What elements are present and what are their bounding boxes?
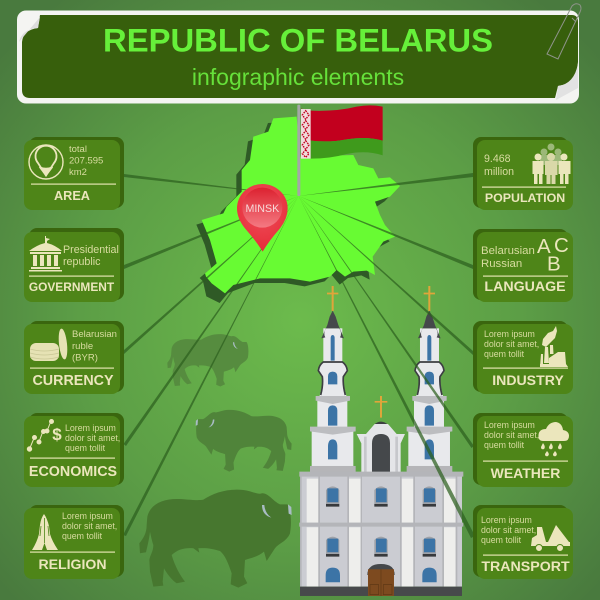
weather text: dolor sit amet, bbox=[484, 430, 539, 440]
religion text: Lorem ipsum bbox=[62, 511, 113, 521]
panel: language bbox=[473, 229, 573, 302]
currency label: CURRENCY bbox=[32, 373, 114, 389]
weather label: WEATHER bbox=[491, 465, 560, 481]
panel: population bbox=[473, 137, 573, 210]
transport text: Lorem ipsum bbox=[481, 515, 532, 525]
transport text: quem tollit bbox=[481, 535, 522, 545]
industry text: quem tollit bbox=[484, 349, 525, 359]
icon: rain cloud bbox=[538, 422, 569, 456]
currency text: ruble bbox=[72, 341, 93, 352]
panel: transport bbox=[473, 505, 573, 579]
weather text: Lorem ipsum bbox=[484, 420, 535, 430]
medium bison bbox=[196, 410, 292, 472]
central gable bbox=[357, 396, 405, 473]
icon: coins bbox=[30, 328, 69, 361]
panel: economics bbox=[24, 413, 124, 487]
language text: Belarusian bbox=[481, 245, 535, 257]
industry label: INDUSTRY bbox=[492, 372, 564, 388]
bison silhouettes bbox=[139, 334, 292, 588]
government label: GOVERNMENT bbox=[29, 280, 115, 294]
icon: paper clip bbox=[547, 4, 581, 59]
economics text: quem tollit bbox=[65, 443, 106, 453]
language text: Russian bbox=[481, 258, 522, 270]
icon: government building bbox=[29, 236, 62, 272]
icon: letters: A bbox=[537, 235, 551, 258]
icon: people group bbox=[532, 144, 570, 184]
banner title: REPUBLIC OF BELARUS bbox=[103, 22, 493, 58]
small bison bbox=[167, 334, 248, 387]
flag of Belarus bbox=[297, 105, 383, 196]
icon: dump truck bbox=[531, 525, 570, 552]
large bison bbox=[139, 490, 292, 588]
government text: Presidential bbox=[63, 244, 119, 256]
transport label: TRANSPORT bbox=[481, 559, 570, 575]
area text: 207.595 bbox=[69, 156, 103, 166]
icon: factory bbox=[540, 326, 568, 367]
main facade bbox=[299, 472, 463, 596]
economics text: Lorem ipsum bbox=[65, 423, 116, 433]
currency text: Belarusian bbox=[72, 329, 117, 340]
panel: industry bbox=[473, 321, 573, 394]
flag pole bbox=[297, 105, 300, 196]
area label: AREA bbox=[54, 189, 90, 203]
transport text: dolor sit amet, bbox=[481, 525, 536, 535]
title banner bbox=[17, 4, 581, 103]
language label: LANGUAGE bbox=[484, 279, 566, 295]
economics text: dolor sit amet, bbox=[65, 433, 120, 443]
map of Belarus bbox=[196, 117, 400, 303]
panel: area bbox=[24, 137, 124, 210]
panel: currency bbox=[24, 321, 124, 394]
panel: government bbox=[24, 228, 124, 302]
church illustration bbox=[299, 286, 463, 596]
icon: economic growth chart: $ bbox=[52, 425, 62, 444]
panel: religion bbox=[24, 505, 124, 579]
religion label: RELIGION bbox=[38, 556, 107, 572]
flag cloth bbox=[301, 105, 383, 141]
economics label: ECONOMICS bbox=[29, 464, 117, 480]
icon: praying hands bbox=[32, 514, 58, 550]
area text: total bbox=[69, 144, 87, 155]
map pin: Minsk bbox=[237, 184, 288, 252]
icon: location pin bbox=[29, 145, 63, 179]
religion text: quem tollit bbox=[62, 531, 103, 541]
connector rays bbox=[123, 173, 475, 538]
icon: letters: C bbox=[554, 234, 569, 257]
government text: republic bbox=[63, 256, 101, 268]
religion text: dolor sit amet, bbox=[62, 521, 117, 531]
map pin: Minsk: MINSK bbox=[245, 203, 279, 215]
right tower bbox=[407, 286, 452, 473]
population text: 9.468 bbox=[484, 153, 511, 165]
icon: letters: B bbox=[547, 252, 561, 276]
area text: km2 bbox=[69, 167, 87, 178]
population text: million bbox=[484, 166, 514, 178]
industry text: dolor sit amet, bbox=[484, 339, 539, 349]
panel: weather bbox=[473, 413, 573, 487]
population label: POPULATION bbox=[485, 191, 565, 205]
banner subtitle: infographic elements bbox=[192, 64, 404, 90]
currency text: (BYR) bbox=[72, 352, 98, 364]
left tower bbox=[310, 286, 356, 473]
weather text: quem tollit bbox=[484, 440, 525, 450]
industry text: Lorem ipsum bbox=[484, 329, 535, 339]
